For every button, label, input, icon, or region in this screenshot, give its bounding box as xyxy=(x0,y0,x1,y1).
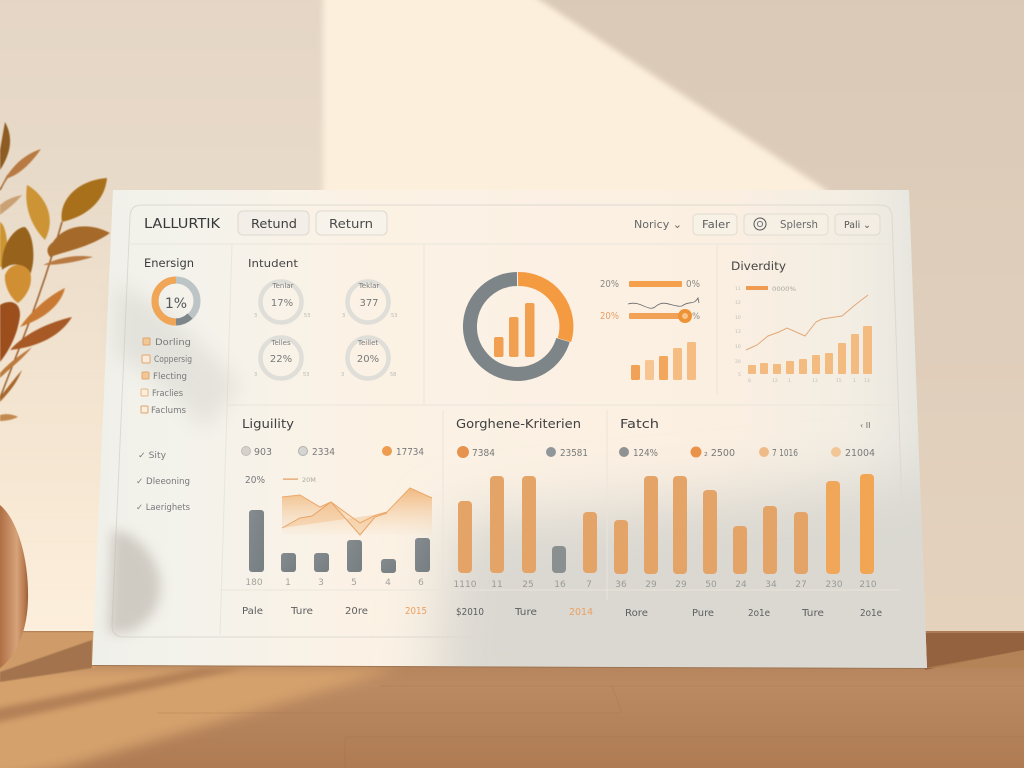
line series xyxy=(746,295,868,350)
x labels: 210 xyxy=(859,580,877,590)
header bar xyxy=(144,211,880,235)
x labels: 50 xyxy=(705,580,717,590)
panel: Diverdity xyxy=(731,259,872,384)
x labels: 11 xyxy=(491,580,503,590)
legend: 21004 xyxy=(845,448,875,459)
x labels xyxy=(245,578,424,588)
button: Retund: Retund xyxy=(251,216,297,231)
footer labels: Ture xyxy=(290,606,313,617)
axis labels: 13 xyxy=(864,378,870,384)
gauge tick labels: 53 xyxy=(304,313,310,319)
legend list: Coppersig xyxy=(154,355,192,365)
wooden table xyxy=(0,631,1024,768)
x labels: 7 xyxy=(586,580,592,590)
panel: Liguility xyxy=(242,416,432,617)
panel: Enersign xyxy=(136,256,197,513)
x labels: 29 xyxy=(675,580,687,590)
x labels: 36 xyxy=(615,580,627,590)
legend: 124% xyxy=(633,448,658,459)
check list: ✓ Laerighets xyxy=(136,503,191,513)
gauge 3: 22% xyxy=(270,354,292,365)
gauge 2: 377 xyxy=(359,298,379,309)
footer labels: 2o1e xyxy=(748,608,770,619)
axis labels: 8 xyxy=(748,378,751,384)
progress rows: 20% xyxy=(600,311,619,322)
donut gauge: 1% xyxy=(165,296,187,312)
x labels: 3 xyxy=(318,578,324,588)
legend list xyxy=(141,338,192,416)
footer labels xyxy=(625,608,882,619)
heading: Fatch xyxy=(620,417,659,431)
footer labels: 2015 xyxy=(405,606,427,617)
legend: 903 xyxy=(254,447,272,458)
gauge tick labels: 3 xyxy=(341,372,344,378)
legend: 7384 xyxy=(472,448,495,459)
axis labels: 1 xyxy=(788,378,791,384)
axis labels xyxy=(735,286,870,384)
footer labels: Ture xyxy=(801,608,824,619)
button: Pali: Pali ⌄ xyxy=(844,220,871,231)
legend xyxy=(619,446,875,459)
gauge 4: 20% xyxy=(357,354,379,365)
control: ‹ II xyxy=(860,421,870,430)
gauge tick labels: 53 xyxy=(391,313,397,319)
bars xyxy=(249,510,430,573)
progress rows: 0% xyxy=(686,279,700,290)
x labels xyxy=(454,580,592,590)
heading: Enersign xyxy=(144,256,194,270)
chart labels: 20% xyxy=(245,475,265,486)
x labels: 16 xyxy=(554,580,566,590)
gauge 4 xyxy=(348,338,388,378)
panel: Intudent xyxy=(248,257,397,378)
check list xyxy=(136,451,191,513)
legend list: Fraclies xyxy=(152,389,184,399)
check list: ✓ Sity xyxy=(138,451,166,461)
button: Faler xyxy=(693,214,737,235)
legend: 17734 xyxy=(396,447,424,458)
vase xyxy=(0,505,28,668)
button: Splersh xyxy=(744,214,828,235)
footer labels: Rore xyxy=(625,608,648,619)
panel: main donut xyxy=(470,279,700,380)
heading: Liguility xyxy=(242,416,295,431)
legend list: Flecting xyxy=(153,372,187,382)
axis labels: 12 xyxy=(772,378,778,384)
gauge 3 xyxy=(260,338,302,378)
title: LALLURTIK xyxy=(144,216,221,232)
axis labels: 13 xyxy=(812,378,818,384)
bars xyxy=(458,476,597,573)
gauge tick labels: 58 xyxy=(390,372,396,378)
gauge 3: Telles xyxy=(270,339,291,347)
legend xyxy=(746,285,796,293)
footer labels xyxy=(242,606,427,617)
small bar chart xyxy=(631,342,696,380)
legend: 2334 xyxy=(312,447,335,458)
menu: Noricy: Noricy ⌄ xyxy=(634,218,682,231)
footer labels: 2o1e xyxy=(860,608,882,619)
area chart xyxy=(282,488,432,535)
gauge tick labels: 3 xyxy=(254,372,257,378)
button: Pali xyxy=(835,214,880,235)
gauge 2 xyxy=(348,282,388,322)
button: Splersh: Splersh xyxy=(780,219,818,231)
donut inner bars xyxy=(494,303,534,357)
footer labels: $2010 xyxy=(456,607,484,618)
x labels: 27 xyxy=(795,580,807,590)
legend xyxy=(457,446,588,459)
vase shadow on panel xyxy=(108,530,160,634)
x labels: 180 xyxy=(245,578,263,588)
legend list: Dorling xyxy=(155,338,191,348)
axis labels: 10 xyxy=(735,315,741,321)
panel: dashboard board xyxy=(92,190,927,669)
x labels: 29 xyxy=(645,580,657,590)
x labels: 6 xyxy=(418,578,424,588)
legend: ₂ 2500 xyxy=(704,448,735,459)
x labels: 1 xyxy=(285,578,291,588)
x labels: 5 xyxy=(351,578,357,588)
leaf shadow on panel xyxy=(115,285,240,430)
gauge tick labels: 53 xyxy=(303,372,309,378)
legend: 23581 xyxy=(560,448,588,459)
footer labels: Pale xyxy=(242,606,263,617)
footer labels xyxy=(456,607,593,618)
gauge 4: Teillet xyxy=(357,339,378,347)
footer labels: Ture xyxy=(514,607,537,618)
gauge tick labels: 3 xyxy=(254,313,257,319)
axis labels: 15 xyxy=(836,378,842,384)
axis labels: 1 xyxy=(853,378,856,384)
x labels: 34 xyxy=(765,580,777,590)
axis labels: 5 xyxy=(738,372,741,378)
legend list: Faclums xyxy=(151,406,187,416)
x labels: 230 xyxy=(825,580,843,590)
heading: Gorghene-Kriterien xyxy=(456,417,581,431)
gauge 1: 17% xyxy=(271,298,293,309)
axis labels: 10 xyxy=(735,344,741,350)
progress rows xyxy=(600,279,700,323)
gauge 2: Teklar xyxy=(358,282,379,290)
button: Return: Return xyxy=(329,217,373,231)
gauge 1 xyxy=(260,282,302,322)
footer labels: 2014 xyxy=(569,607,593,618)
bars xyxy=(614,474,874,574)
panel: Gorghene-Kriterien xyxy=(454,417,597,618)
legend: 0000% xyxy=(772,285,796,293)
heading: Intudent xyxy=(248,257,299,270)
bar series xyxy=(748,326,872,374)
button: Retund xyxy=(238,211,309,235)
donut chart xyxy=(470,279,566,374)
progress rows: 20% xyxy=(600,279,619,290)
heading: Diverdity xyxy=(731,259,786,273)
donut gauge xyxy=(155,280,197,322)
button: Return xyxy=(316,211,387,235)
x labels: 4 xyxy=(385,578,391,588)
x labels: 1110 xyxy=(454,580,477,590)
axis labels: 20 xyxy=(735,359,741,365)
legend: 7 1016 xyxy=(772,448,798,459)
footer labels: Pure xyxy=(692,608,714,619)
x labels xyxy=(615,580,877,590)
axis labels: 12 xyxy=(735,300,741,306)
axis labels: 11 xyxy=(735,286,741,292)
gauge tick labels: 3 xyxy=(342,313,345,319)
legend xyxy=(242,446,424,458)
footer labels: 20re xyxy=(345,606,368,617)
progress rows: % xyxy=(692,312,700,322)
check list: ✓ Dleeoning xyxy=(136,477,190,487)
gauge 1: Tenlar xyxy=(272,282,294,290)
x labels: 25 xyxy=(522,580,534,590)
button: Faler: Faler xyxy=(702,219,731,231)
icon: plant xyxy=(0,122,110,421)
x labels: 24 xyxy=(735,580,747,590)
gauge tick labels xyxy=(254,313,397,378)
panel: Fatch xyxy=(614,417,882,619)
panel: Liguility: 20M xyxy=(302,476,316,484)
axis labels: 13 xyxy=(735,329,741,335)
